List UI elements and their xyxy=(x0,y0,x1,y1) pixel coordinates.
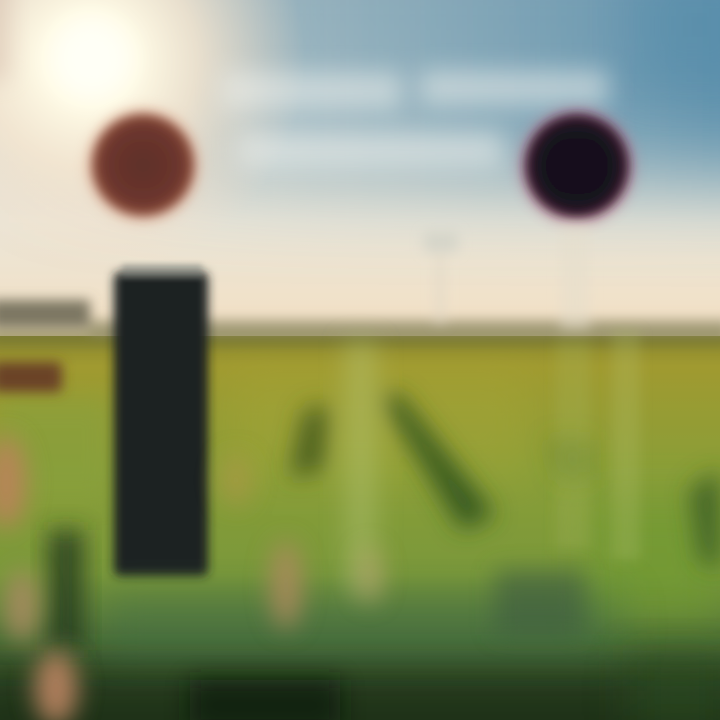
left horizontal dark tag xyxy=(0,362,62,392)
title text block, blurred xyxy=(222,70,608,168)
right circular marker xyxy=(517,106,637,226)
sky background xyxy=(0,0,720,340)
horizon treeline xyxy=(0,300,720,346)
dark vertical bar xyxy=(114,264,208,576)
field background xyxy=(0,336,720,720)
sun glow xyxy=(0,0,305,275)
crop rows xyxy=(290,340,720,600)
left circular marker xyxy=(85,107,201,223)
bottom foliage xyxy=(0,530,720,720)
center small marker xyxy=(424,232,458,324)
foreground blurred plants xyxy=(0,436,382,720)
right vertical post xyxy=(556,225,640,560)
